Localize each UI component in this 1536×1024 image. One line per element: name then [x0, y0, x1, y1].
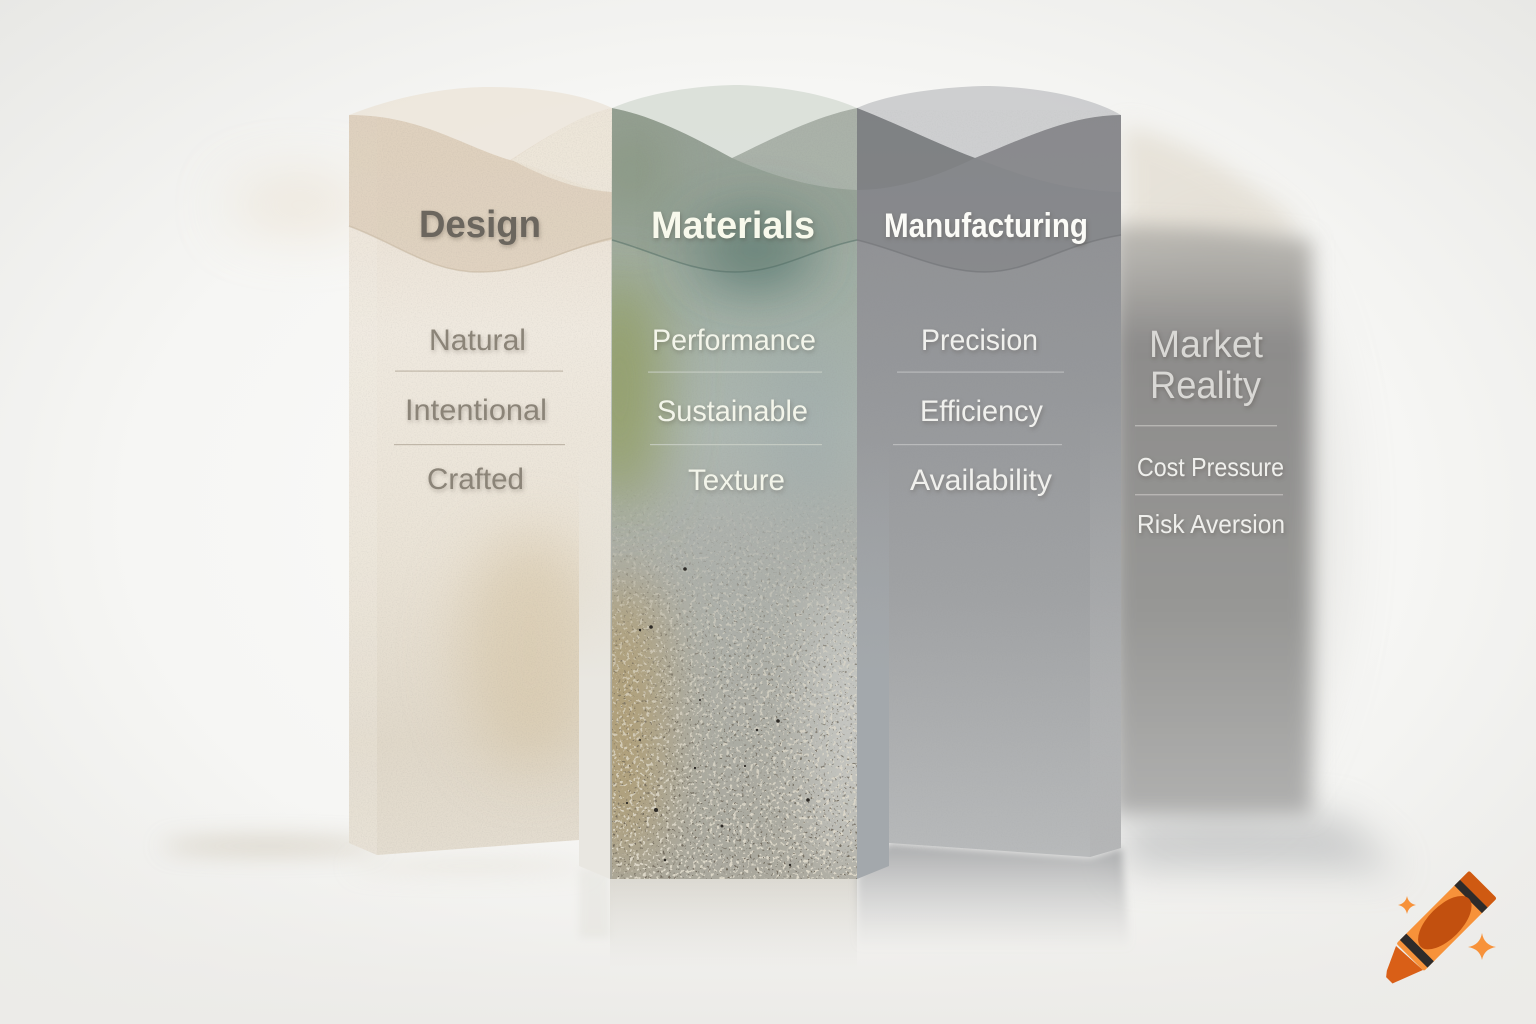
top lens band [857, 158, 1121, 272]
icon: crayon logo [1374, 871, 1497, 993]
crayon [1374, 871, 1497, 993]
translucent back arc [612, 85, 857, 158]
heading: Materials: Materials [651, 205, 815, 247]
list: Design items: Natural [429, 324, 526, 357]
panel: Manufacturing [857, 86, 1121, 857]
panel: Market Reality [1112, 125, 1312, 815]
list: Market Reality items: Cost Pressure [1137, 452, 1284, 482]
panel: Materials [579, 85, 889, 880]
floor shadows and reflections [160, 815, 1400, 969]
list: Materials items: Performance [652, 324, 816, 357]
list: Materials items: Texture [688, 464, 785, 497]
heading: Market Reality [1149, 324, 1263, 407]
top motion streak [1122, 125, 1295, 240]
list: Materials items [648, 324, 822, 497]
column face [349, 108, 612, 855]
list: Manufacturing items [893, 324, 1064, 497]
list: Design items: Crafted [427, 463, 524, 496]
column face [857, 108, 1121, 857]
grain [857, 110, 1121, 850]
heading: Market Reality: Market [1149, 324, 1263, 366]
blurred column body [1112, 225, 1312, 815]
bottom band edge [349, 226, 612, 272]
dark specks [626, 567, 810, 866]
heading: Design: Design [419, 204, 541, 246]
clipped tone [349, 100, 612, 860]
list: Manufacturing items: Precision [921, 324, 1038, 357]
sparkle small [1398, 896, 1416, 914]
list: Materials items: Sustainable [657, 395, 808, 428]
list: Manufacturing items: Availability [910, 464, 1052, 497]
colour blooms and terrazzo [612, 108, 857, 879]
column face [610, 108, 857, 879]
translucent back arc [857, 86, 1121, 158]
left chamfer [579, 430, 610, 879]
sparkle large [1468, 933, 1496, 960]
translucent back arc [349, 87, 612, 200]
heading: Market Reality: Reality [1150, 365, 1261, 407]
list: Market Reality items: Risk Aversion [1137, 509, 1285, 539]
list: Design items [394, 324, 565, 496]
right chamfer [1090, 400, 1121, 857]
list: Manufacturing items: Efficiency [920, 395, 1043, 428]
panel: Design [349, 87, 612, 860]
list: Market Reality items [1135, 425, 1285, 539]
list: Design items: Intentional [405, 394, 547, 427]
right chamfer [857, 440, 889, 879]
heading: Manufacturing: Manufacturing [884, 207, 1088, 245]
